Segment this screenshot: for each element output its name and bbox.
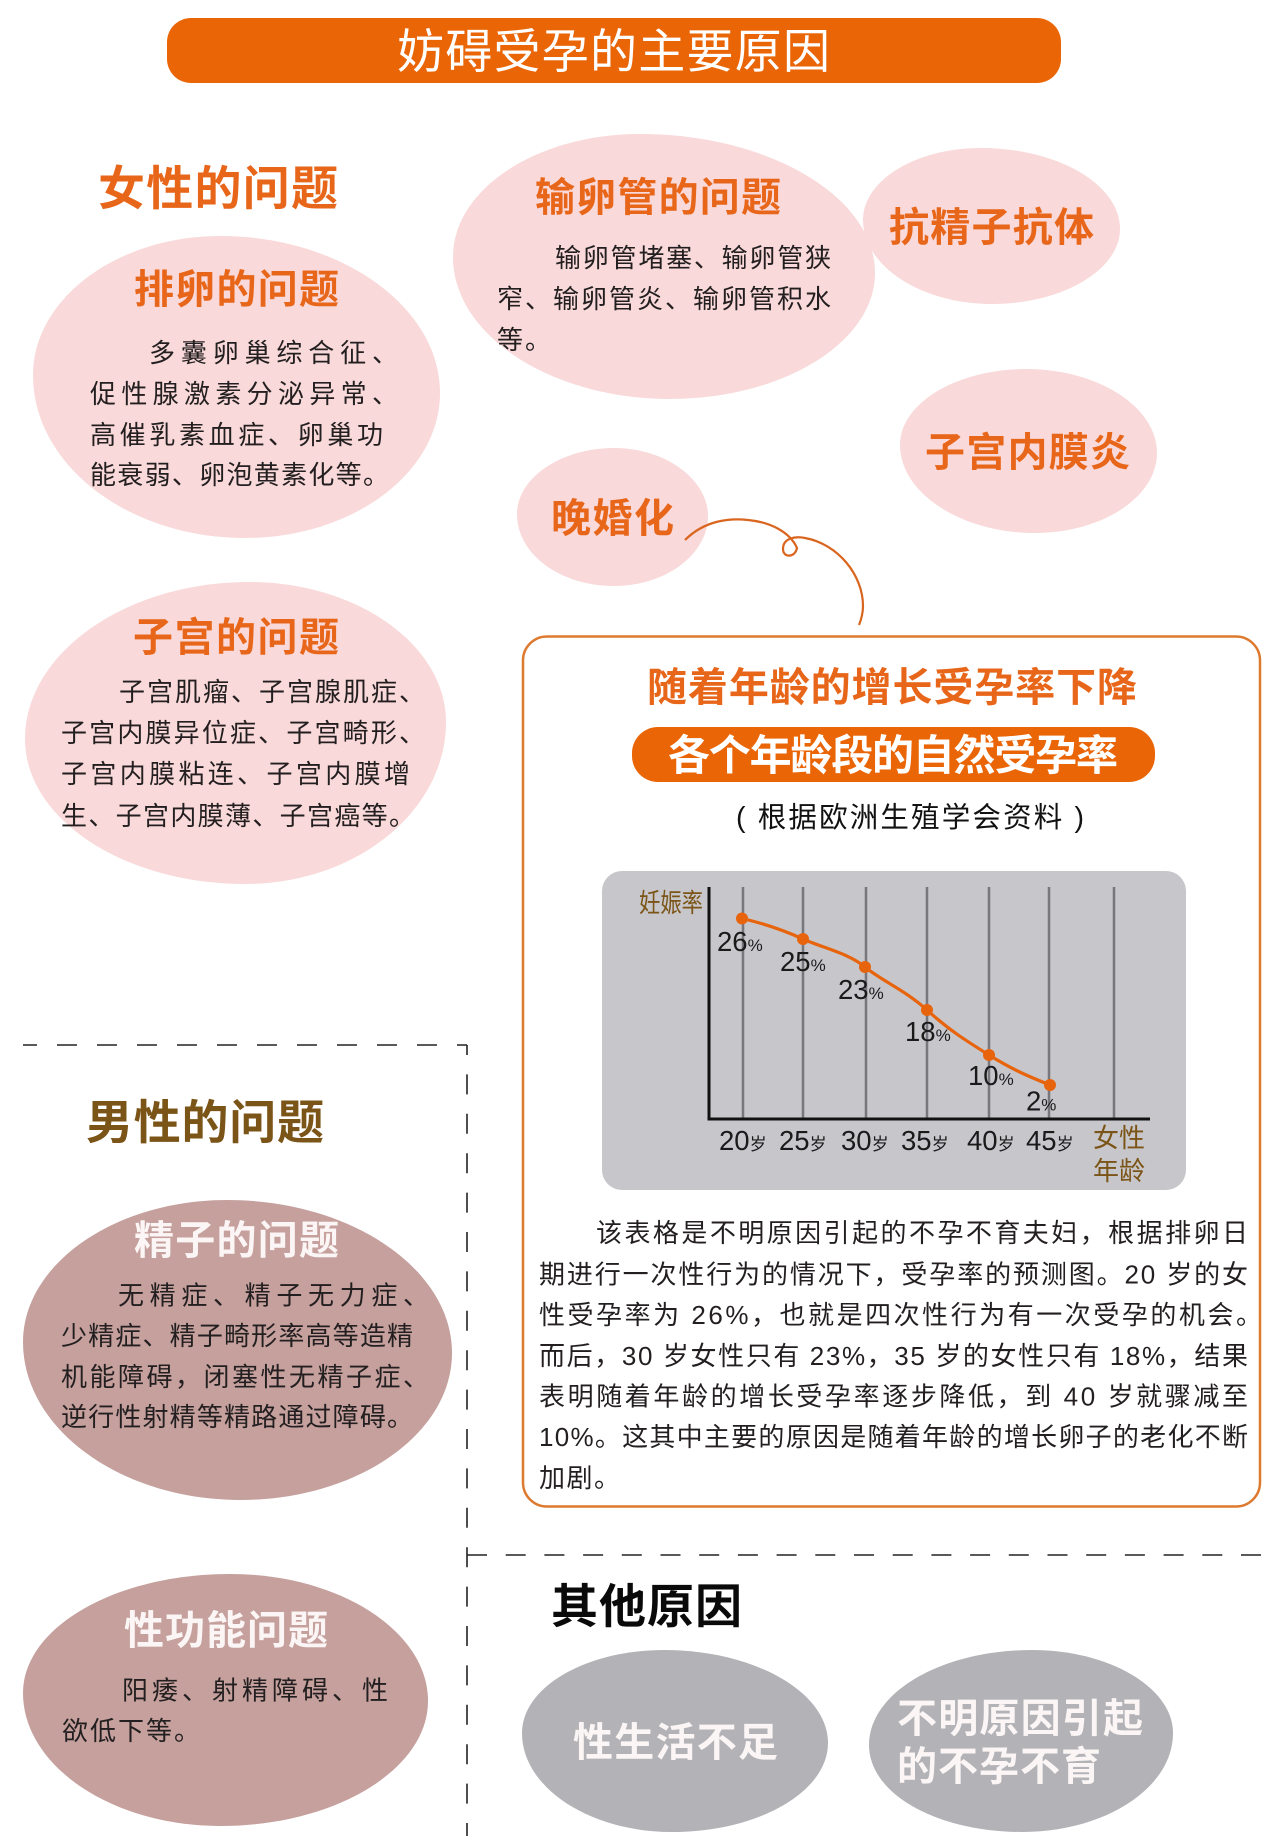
panel: uterus problems: 子宫肌瘤、子宫腺肌症、 [119, 677, 425, 707]
panel: uterus problems: 生、子宫内膜薄、子宫癌等。 [61, 801, 415, 831]
panel: sperm problems [23, 1200, 452, 1500]
explanation text: 期进行一次性行为的情况下，受孕率的预测图。20 岁的女 [539, 1260, 1248, 1290]
line chart: 45岁 [1026, 1125, 1074, 1156]
line chart: 40岁 [967, 1125, 1015, 1156]
panel: antisperm antibodies: 抗精子抗体 [889, 206, 1094, 250]
line chart: 35岁 [901, 1125, 949, 1156]
explanation text: 而后，30 岁女性只有 23%，35 岁的女性只有 18%，结果 [539, 1341, 1248, 1371]
line chart: 妊娠率 [639, 888, 703, 918]
line chart: 25% [780, 946, 826, 977]
panel: sexual function problems: 欲低下等。 [62, 1716, 200, 1746]
title banner [167, 18, 1061, 83]
explanation text [539, 1218, 1262, 1493]
panel: fallopian tube problems: 窄、输卵管炎、输卵管积水 [497, 284, 831, 314]
source note: ( 根据欧洲生殖学会资料 ) [736, 802, 1084, 834]
panel: fallopian tube problems: 等。 [497, 325, 551, 355]
panel: endometritis: 子宫内膜炎 [925, 431, 1130, 475]
line chart: 30岁 [841, 1125, 889, 1156]
panel: fallopian tube problems [453, 134, 875, 399]
chart title pill: 各个年龄段的自然受孕率 [668, 732, 1118, 779]
line chart: 2% [1026, 1086, 1056, 1116]
panel: ovulation problems [33, 236, 440, 538]
explanation text: 表明随着年龄的增长受孕率逐步降低，到 40 岁就骤减至 [539, 1382, 1248, 1412]
line chart: 25岁 [779, 1125, 827, 1156]
title banner: 妨碍受孕的主要原因 [397, 25, 830, 78]
panel: unexplained infertility: 不明原因引起 [897, 1697, 1143, 1741]
explanation text: 加剧。 [539, 1463, 620, 1493]
panel: fallopian tube problems: 输卵管堵塞、输卵管狭 [555, 243, 831, 273]
explanation text: 该表格是不明原因引起的不孕不育夫妇，根据排卵日 [596, 1218, 1248, 1248]
panel: sperm problems: 精子的问题 [134, 1219, 339, 1263]
line chart: 10% [968, 1060, 1014, 1091]
heading: female problems: 女性的问题 [98, 162, 338, 215]
panel: fertility falls with age [523, 636, 1262, 1506]
line chart: 23% [838, 974, 884, 1005]
panel: late marriage: 晚婚化 [551, 497, 674, 541]
arrow: curl connecting late marriage to the age panel [685, 519, 863, 625]
panel: ovulation problems: 能衰弱、卵泡黄素化等。 [90, 460, 389, 490]
panel: sexual function problems [23, 1574, 428, 1826]
line chart: 年龄 [1093, 1156, 1145, 1186]
panel: ovulation problems: 多囊卵巢综合征、 [149, 338, 398, 368]
panel: sperm problems: 少精症、精子畸形率高等造精 [61, 1321, 413, 1351]
panel: insufficient sex life: 性生活不足 [573, 1721, 778, 1765]
panel: ovulation problems: 促性腺激素分泌异常、 [90, 379, 398, 409]
line chart: 女性 [1093, 1123, 1145, 1153]
panel: insufficient sex life [522, 1650, 828, 1832]
panel: uterus problems [25, 582, 446, 884]
panel: uterus problems: 子宫内膜异位症、子宫畸形、 [61, 718, 425, 748]
explanation text: 10%。这其中主要的原因是随着年龄的增长卵子的老化不断 [539, 1422, 1248, 1452]
panel: endometritis [900, 369, 1157, 533]
panel: sperm problems: 逆行性射精等精路通过障碍。 [61, 1402, 413, 1432]
panel heading: 随着年龄的增长受孕率下降 [647, 666, 1137, 710]
line chart: 26% [717, 926, 763, 957]
heading: other causes: 其他原因 [551, 1580, 742, 1633]
panel: ovulation problems: 排卵的问题 [134, 268, 339, 312]
panel: unexplained infertility [869, 1650, 1173, 1832]
explanation text: 性受孕率为 26%，也就是四次性行为有一次受孕的机会。 [539, 1300, 1262, 1330]
panel: sperm problems: 无精症、精子无力症、 [118, 1280, 429, 1310]
line chart: 20岁 [719, 1125, 767, 1156]
panel: sperm problems: 机能障碍，闭塞性无精子症、 [61, 1362, 429, 1392]
panel: late marriage [517, 448, 708, 586]
panel: fallopian tube problems: 输卵管的问题 [535, 176, 781, 220]
panel: sexual function problems: 性功能问题 [124, 1609, 328, 1653]
line chart [602, 871, 1186, 1190]
panel: unexplained infertility: 的不孕不育 [897, 1745, 1101, 1789]
panel: uterus problems: 子宫的问题 [133, 616, 339, 660]
panel: antisperm antibodies [863, 148, 1120, 304]
panel: ovulation problems: 高催乳素血症、卵巢功 [90, 420, 383, 450]
panel: sexual function problems: 阳痿、射精障碍、性 [122, 1676, 388, 1706]
heading: male problems: 男性的问题 [86, 1096, 324, 1149]
line chart: 18% [905, 1016, 951, 1047]
panel: uterus problems: 子宫内膜粘连、子宫内膜增 [61, 759, 410, 789]
